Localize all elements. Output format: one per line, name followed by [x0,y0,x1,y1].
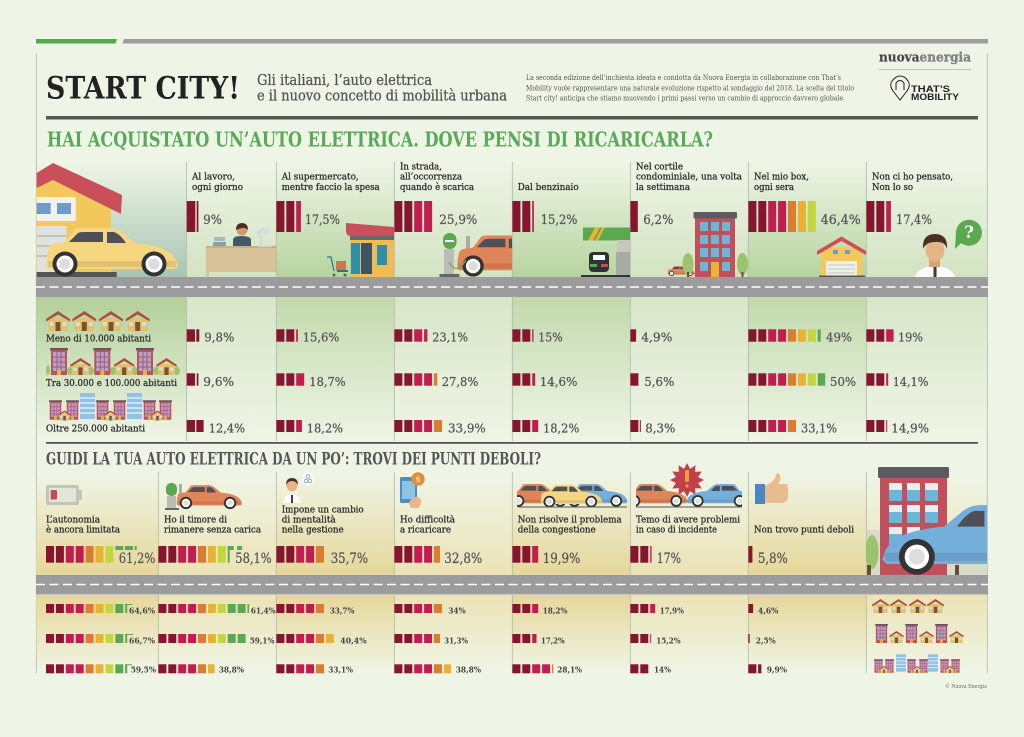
icon: shop and cart [327,223,394,277]
label: rimanere senza carica [164,525,261,536]
road top [36,277,988,297]
row bars: col A [46,604,133,673]
icon: petrol station [581,228,630,277]
label: la settimana [636,182,690,193]
section rule [46,442,978,444]
icon: car crash [636,463,742,508]
values: col 6: 50% [830,375,856,389]
intro text: Mobility vuole rappresentare una naturale evoluzione rispetto al sondaggio del 2018. La scelta del titolo [526,84,854,92]
values: col G: 9,9% [767,665,787,675]
label: Temo di avere problemi [636,515,740,526]
icon: apartment building [668,212,748,277]
values: col D: 31,3% [444,635,468,645]
column: In strada [394,162,512,277]
label: Dal benzinaio [518,182,579,193]
logo: That's Mobility: MOBILITY [911,92,959,102]
values: col A [129,605,156,675]
bar 6,2% [630,201,638,232]
label: di mentalità [282,515,336,526]
column: Al supermercato [276,172,394,277]
values: col 4 [538,331,579,435]
values: col C [328,605,367,675]
values: col D: 38,8% [456,665,481,675]
column: Non ci ho pensato [866,172,982,277]
label [400,515,455,536]
values: col 2: 15,6% [303,331,339,345]
value: 19,9% [543,551,580,567]
label: Al lavoro, [191,172,235,182]
values: col 4: 14,6% [540,375,577,389]
value: 32,8% [444,551,482,567]
bar 5,8% [748,546,752,563]
values: col 7 [891,331,929,435]
value: 6,2% [643,213,673,228]
label [281,172,380,193]
icon: battery [46,485,82,505]
value: 35,7% [331,551,368,567]
frame lines [36,53,987,673]
label: Non lo so [872,182,913,193]
logo: That's Mobility [891,76,959,102]
value: 17,4% [896,213,932,228]
section heading: weak points: GUIDI LA TUA AUTO ELETTRICA DA UN PO’: TROVI DEI PUNTI DEBOLI? [46,450,541,469]
row bars: col 7 [866,329,894,432]
row labels: city size [46,311,180,435]
values: col 6 [801,331,856,435]
label: della congestione [518,525,596,536]
row bars: col E [512,604,553,673]
values: col F: 15,2% [656,635,681,645]
values: col B [219,605,276,675]
values: col E [541,605,582,675]
values: col E: 28,1% [557,665,582,675]
label: under 10,000: Meno di 10.000 abitanti [46,334,151,344]
section heading: charging: HAI ACQUISTATO UN’AUTO ELETTRICA. DOVE PENSI DI RICARICARLA? [47,128,713,152]
label: In strada, [400,162,442,172]
value: 17,5% [305,213,340,228]
label [400,162,474,193]
row bars: col B [158,604,249,673]
label [164,515,261,536]
values: col 2 [303,331,346,435]
table: weak points by city size [46,599,964,675]
illustration: building and blue car [866,467,987,575]
label [282,505,364,536]
subtitle: Gli italiani, l’auto elettrica [257,73,432,89]
row bars: col 2 [276,329,304,432]
row bars: col G [748,604,761,673]
values: col 4: 15% [538,331,563,345]
row bars: col F [630,604,655,673]
icon: phone, hand and coin: $ [415,474,421,484]
icon: thumbs up [755,473,788,504]
bar 17,4% [866,201,891,232]
bar 58,1% [158,546,242,563]
upper panel backgrounds [36,162,987,442]
intro text [526,74,854,103]
subtitle [257,73,507,104]
title: START CITY! [46,70,240,106]
label: Non ci ho pensato, [872,172,953,182]
road bottom [36,575,988,594]
label: all’occorrenza [400,172,462,182]
icon: large city [49,393,172,420]
values: col 5: 5,6% [644,375,674,389]
label [754,172,809,193]
values: col 1: 9,6% [203,375,234,389]
values: col 4: 18,2% [543,421,579,435]
label: condominiale, una volta [636,172,742,182]
value: 17% [657,551,681,567]
intro text: Start city! anticipa che stiamo muovendo i primi passi verso un cambio di approccio davvero globale. [526,95,845,103]
values: col 7: 19% [898,331,923,345]
logo: That's Mobility: THAT’S [911,84,950,94]
values: col 3: 27,8% [442,375,478,389]
logo: nuova energia: nuovaenergia [879,50,972,66]
label: Non trovo punti deboli [754,525,854,536]
label [636,515,740,536]
label [46,515,120,536]
bar 61,2% [46,546,137,563]
label: Nel cortile [636,162,683,172]
value: 46,4% [821,213,861,228]
table: charging by city size [187,329,929,435]
value: 25,9% [439,213,477,228]
icons: city size legend [872,599,964,673]
label: in caso di incidente [636,525,717,536]
bar 17,5% [276,201,301,232]
icon: small town [46,311,150,331]
values: col G: 4,6% [758,605,779,615]
value: 9% [203,213,222,228]
label: Nel mio box, [754,172,809,182]
values: col 1 [203,331,245,435]
column: mentalita [276,472,368,567]
values: col 1: 12,4% [209,421,245,435]
values: col C: 33,1% [328,665,353,675]
values: col B: 59,1% [250,635,275,645]
label [636,162,742,193]
label: a ricaricare [400,525,451,536]
column: Dal benzinaio [512,182,630,277]
label: Impone un cambio [282,505,364,516]
values: col 2: 18,2% [307,421,343,435]
values: col 3: 23,1% [432,331,468,345]
values: col G [756,605,787,675]
values: col E: 17,2% [541,635,565,645]
values: col 5: 8,3% [645,421,675,435]
values: col F: 14% [654,665,671,675]
values: col D [444,605,481,675]
values: col B: 61,4% [251,605,276,615]
values: col B: 38,8% [219,665,244,675]
bar 25,9% [394,201,432,232]
bar 15,2% [512,201,534,232]
header [46,50,972,106]
bar 35,7% [276,546,324,563]
values: col 6: 49% [826,331,852,345]
label: Ho il timore di [164,515,227,526]
label: è ancora limitata [46,525,120,536]
label: ogni sera [754,182,794,193]
value: 58,1% [235,551,272,567]
label: quando è scarica [400,182,474,193]
values: col 3: 33,9% [448,421,486,435]
column: incidente [630,463,742,564]
column: Nel cortile [630,162,748,277]
label [518,515,622,536]
values: col F [654,605,684,675]
lower panel backgrounds [36,472,987,673]
illustration: house and yellow car [36,163,178,277]
column: congestione [510,484,628,567]
values: col F: 17,9% [660,605,684,615]
column: Al lavoro [187,172,276,277]
values: col 3 [432,331,486,435]
label: L’autonomia [46,515,100,526]
row bars: col 3 [394,329,442,432]
subtitle: e il nuovo concetto di mobilità urbana [257,88,507,104]
icon: house with garage [817,236,866,277]
values: col C: 33,7% [330,605,355,615]
row bars: col 6 [748,329,825,432]
label: ogni giorno [192,182,243,193]
values: col 7: 14,9% [891,421,929,435]
icon: charging station and orange car [440,233,512,277]
icon: man with question mark: ? [964,223,974,243]
label: over 250,000: Oltre 250.000 abitanti [46,424,145,435]
icon: mid town [46,348,180,375]
bar 46,4% [748,201,816,232]
label: 30,000-100,000: Tra 30.000 e 100.000 abitanti [46,378,177,389]
column: timore [158,483,272,567]
values: col 6: 33,1% [801,421,837,435]
row bars: col 5 [630,329,641,432]
values: col C: 40,4% [340,635,367,645]
values: col A: 64,6% [129,605,155,615]
values: col D: 34% [448,605,466,615]
column: nessun punto debole [748,473,854,567]
bar 17% [630,546,652,563]
bar 9% [187,201,198,232]
label: Al supermercato, [281,172,359,182]
label: mentre faccio la spesa [282,182,380,193]
header rule [46,116,978,120]
top green accent bar [36,39,117,44]
values: col 1: 9,8% [204,331,234,345]
label: Ho difficoltà [400,515,455,526]
label: Non risolve il problema [518,515,622,526]
intro text: La seconda edizione dell’inchiesta ideata e condotta da Nuova Energia in collaborazione con That’s [526,74,841,82]
label: nella gestione [282,525,344,536]
row bars: col 1 [187,329,204,432]
label [191,172,243,193]
value: 61,2% [119,551,155,567]
icon: office desk [206,223,276,277]
icon: charging orange car [165,483,242,510]
values: col E: 18,2% [543,605,568,615]
icon: man with thought bubble [283,472,314,503]
label [872,172,953,193]
row bars: col C [276,604,334,673]
top grey bar [122,39,988,44]
column: difficolta [394,472,482,567]
row bars: col 4 [512,329,538,432]
copyright: © Nuova Energia [945,683,988,690]
values: col G: 2,5% [756,635,776,645]
column: autonomia [46,485,155,567]
values: col A: 59,5% [131,665,156,675]
values: col 7: 14,1% [893,375,928,389]
values: col A: 66,7% [129,635,155,645]
row bars: col D [394,604,451,673]
values: col 2: 18,7% [309,375,346,389]
value: 5,8% [758,551,788,567]
icon: traffic jam cars [510,484,628,508]
values: col 5 [641,331,675,435]
column: Nel mio box [748,172,866,277]
bar 32,8% [394,546,440,563]
bar 19,9% [512,546,538,563]
value: 15,2% [541,213,577,228]
values: col 5: 4,9% [641,331,672,345]
